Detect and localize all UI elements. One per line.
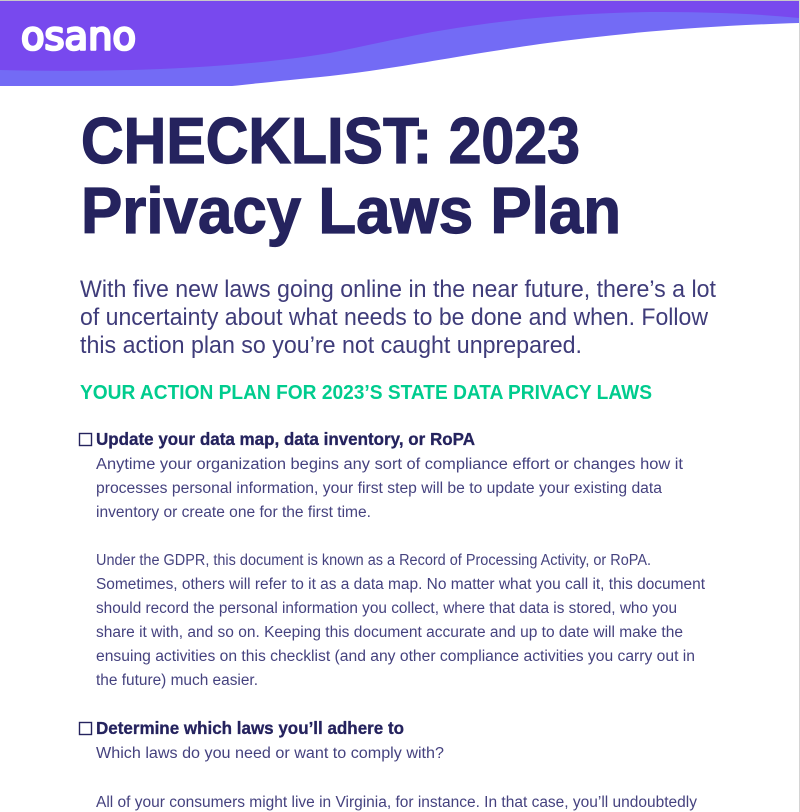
item body text: should record the personal information you collect, where that data is stored, who you xyxy=(96,600,677,617)
icon: checkbox xyxy=(80,722,92,734)
title: CHECKLIST: 2023 xyxy=(81,105,580,177)
intro paragraph: this action plan so you’re not caught unprepared. xyxy=(80,332,582,359)
item body text: All of your consumers might live in Virginia, for instance. In that case, you’ll undoubtedly xyxy=(96,794,697,811)
item body text xyxy=(96,456,706,689)
intro paragraph: With five new laws going online in the near future, there’s a lot xyxy=(80,276,716,303)
item body text: ensuing activities on this checklist (and any other compliance activities you carry out in xyxy=(96,648,695,665)
item heading: Update your data map, data inventory, or RoPA xyxy=(96,429,475,449)
item body text: processes personal information, your first step will be to update your existing data xyxy=(96,480,662,497)
item body text: Anytime your organization begins any sort of compliance effort or changes how it xyxy=(96,456,684,473)
item heading: Determine which laws you’ll adhere to xyxy=(96,718,404,738)
title: Privacy Laws Plan xyxy=(81,175,621,247)
item body text: Sometimes, others will refer to it as a data map. No matter what you call it, this document xyxy=(96,576,706,593)
item body text xyxy=(96,745,697,811)
intro paragraph: of uncertainty about what needs to be done and when. Follow xyxy=(80,304,708,331)
item body text: Under the GDPR, this document is known as a Record of Processing Activity, or RoPA. xyxy=(96,552,651,569)
section heading: YOUR ACTION PLAN FOR 2023’S STATE DATA PRIVACY LAWS xyxy=(80,382,652,404)
title xyxy=(81,105,621,247)
item body text: share it with, and so on. Keeping this document accurate and up to date will make the xyxy=(96,624,683,641)
icon: checkbox xyxy=(80,434,92,446)
checklist item 1 xyxy=(80,429,706,689)
item body text: Which laws do you need or want to comply with? xyxy=(96,745,444,762)
item body text: inventory or create one for the first time. xyxy=(96,504,371,521)
item body text: the future) much easier. xyxy=(96,672,258,689)
intro paragraph xyxy=(80,276,716,359)
checklist item 2 xyxy=(80,718,697,811)
logo: osano xyxy=(21,14,136,60)
